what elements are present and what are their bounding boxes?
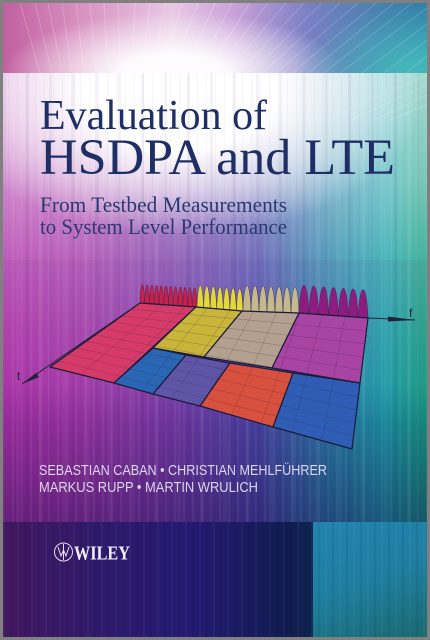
logo emblem [54,543,72,561]
axis f: f [409,306,413,320]
purple block [272,313,368,383]
beige peaks [243,286,299,313]
blue block [114,348,186,394]
authors [39,461,327,496]
title line 1: Evaluation of [40,93,267,139]
purple peaks [299,285,368,318]
time-frequency resource grid [50,303,368,449]
subtitle: to System Level Performance [40,214,287,239]
red block [50,303,196,383]
yellow block [153,307,242,357]
subtitle [40,192,287,239]
grid lines [59,304,366,441]
title [40,93,395,185]
subtitle: From Testbed Measurements [40,192,287,217]
dark blue block [273,373,360,449]
yellow peaks [197,285,243,311]
wordmark: WILEY [74,542,130,564]
diagonal light rays [20,3,427,122]
title line 2: HSDPA and LTE [40,129,395,185]
violet block [153,355,230,406]
authors: SEBASTIAN CABAN • CHRISTIAN MEHLFÜHRER [39,461,327,479]
axis f [368,306,415,322]
orange block [200,363,293,427]
axis t: t [17,369,21,383]
beige block [204,311,299,368]
authors: MARKUS RUPP • MARTIN WRULICH [39,479,258,496]
Wiley logo [54,542,130,564]
red peaks [140,284,197,307]
frequency domain peaks [140,284,368,318]
axis t [17,303,140,384]
